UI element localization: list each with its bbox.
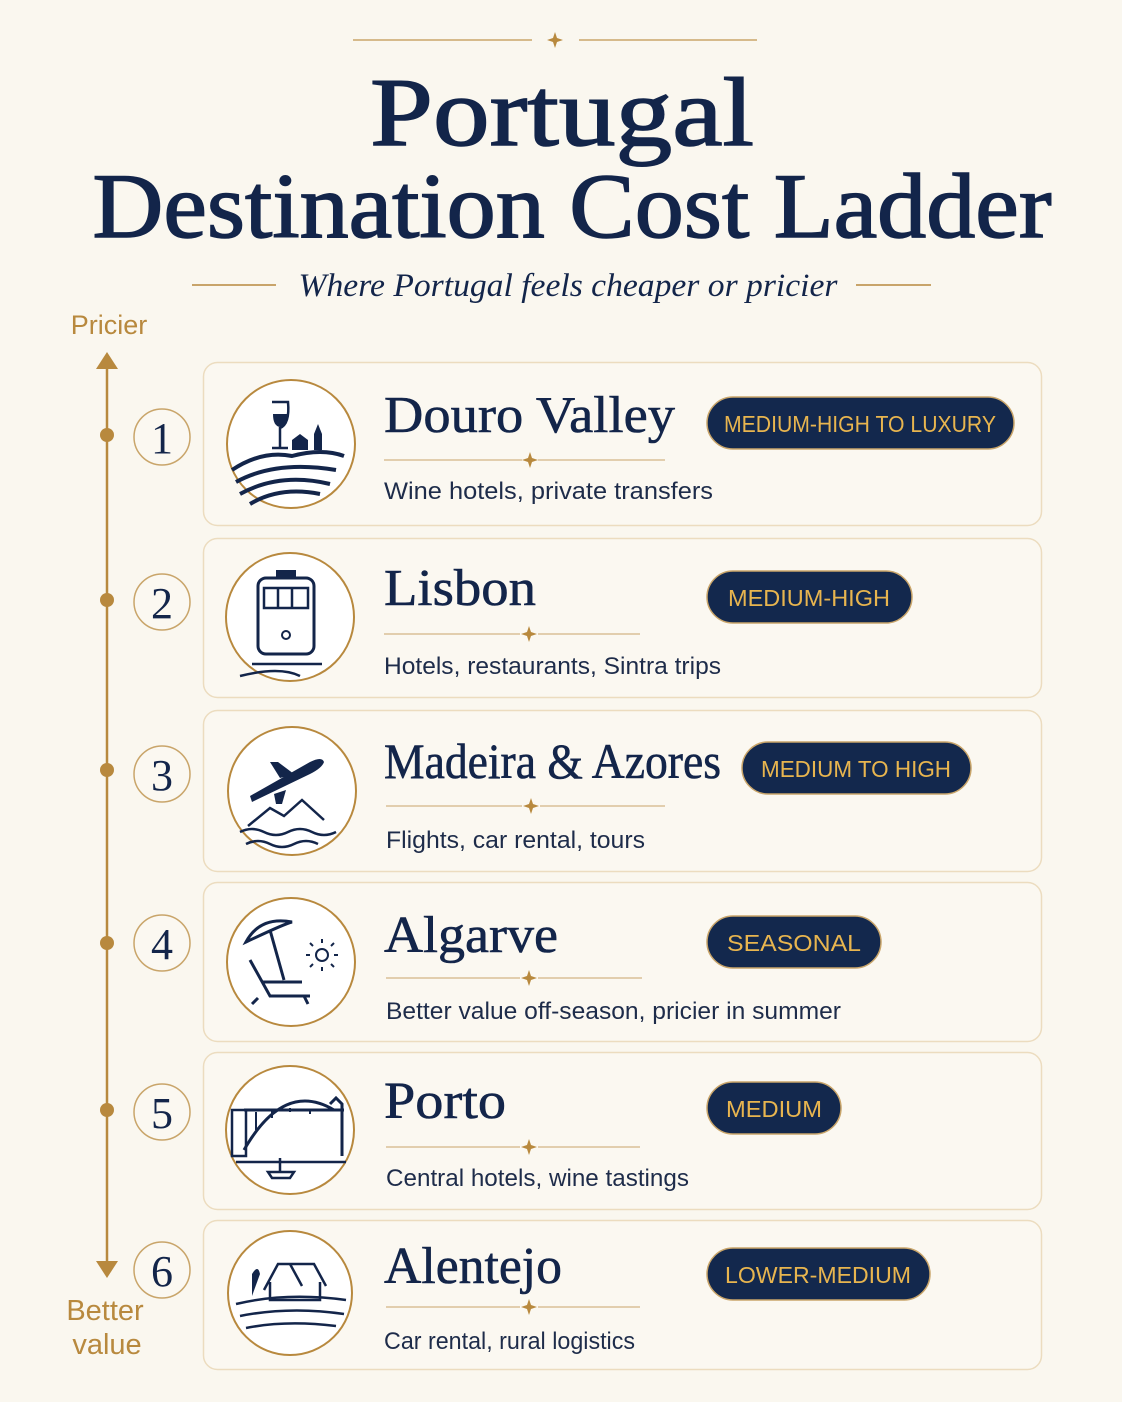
number 6 (134, 1242, 190, 1298)
icon: bridge (226, 1066, 354, 1194)
subtitle: Where Portugal feels cheaper or pricier (298, 268, 838, 304)
number 1: 1 (151, 414, 173, 463)
card 1: Douro Valley: Douro Valley (384, 387, 675, 444)
number 5: 5 (151, 1089, 173, 1138)
card 3: Madeira & Azores: Madeira & Azores (384, 733, 721, 789)
axis: pricier to better value: value (72, 1329, 142, 1361)
card 2: Lisbon: Hotels, restaurants, Sintra trips (384, 653, 721, 680)
title: Portugal (370, 59, 754, 167)
badge: MEDIUM (726, 1096, 822, 1122)
badge (742, 742, 971, 794)
axis: pricier to better value: Better (66, 1295, 144, 1327)
axis: pricier to better value: Pricier (71, 310, 147, 340)
icon: wine and vineyard (227, 380, 355, 508)
card 4: Algarve (134, 882, 1042, 1042)
number 2 (134, 574, 190, 630)
badge: MEDIUM TO HIGH (761, 756, 951, 782)
badge (707, 571, 912, 623)
card 3: Madeira & Azores (134, 710, 1042, 872)
card 6: Alentejo (134, 1220, 1042, 1370)
card 6: Alentejo: Alentejo (384, 1238, 562, 1295)
title: Destination Cost Ladder (92, 155, 1052, 257)
card 1: Douro Valley (134, 362, 1042, 526)
card 5: Porto: Porto (384, 1073, 506, 1130)
badge: LOWER-MEDIUM (725, 1262, 911, 1288)
number 6: 6 (151, 1247, 173, 1296)
badge (707, 916, 881, 968)
number 4 (134, 915, 190, 971)
card 4: Algarve: Better value off-season, pricier in summer (386, 998, 841, 1025)
axis: pricier to better value (66, 310, 147, 1361)
number 4: 4 (151, 920, 173, 969)
badge (707, 1248, 930, 1300)
number 2: 2 (151, 579, 173, 628)
card 6: Alentejo: Car rental, rural logistics (384, 1328, 635, 1355)
card 5: Porto (134, 1052, 1042, 1210)
icon: farmhouse (228, 1231, 352, 1355)
badge: MEDIUM-HIGH (728, 585, 890, 611)
badge (707, 397, 1014, 449)
card 5: Porto: Central hotels, wine tastings (386, 1165, 689, 1192)
card 3: Madeira & Azores: Flights, car rental, tours (386, 827, 645, 854)
title (92, 59, 1052, 257)
icon: beach umbrella (227, 898, 355, 1026)
number 3 (134, 746, 190, 802)
card 2: Lisbon: Lisbon (384, 560, 536, 617)
card 1: Douro Valley: Wine hotels, private transfers (384, 478, 713, 505)
number 1 (134, 409, 190, 465)
badge: SEASONAL (727, 930, 861, 956)
card 2: Lisbon (134, 538, 1042, 698)
number 5 (134, 1084, 190, 1140)
card 4: Algarve: Algarve (384, 907, 558, 964)
icon: tram (226, 553, 354, 681)
badge (707, 1082, 841, 1134)
badge: MEDIUM-HIGH TO LUXURY (724, 411, 996, 437)
top ornament (353, 32, 757, 48)
icon: plane and island (228, 727, 356, 855)
number 3: 3 (151, 751, 173, 800)
